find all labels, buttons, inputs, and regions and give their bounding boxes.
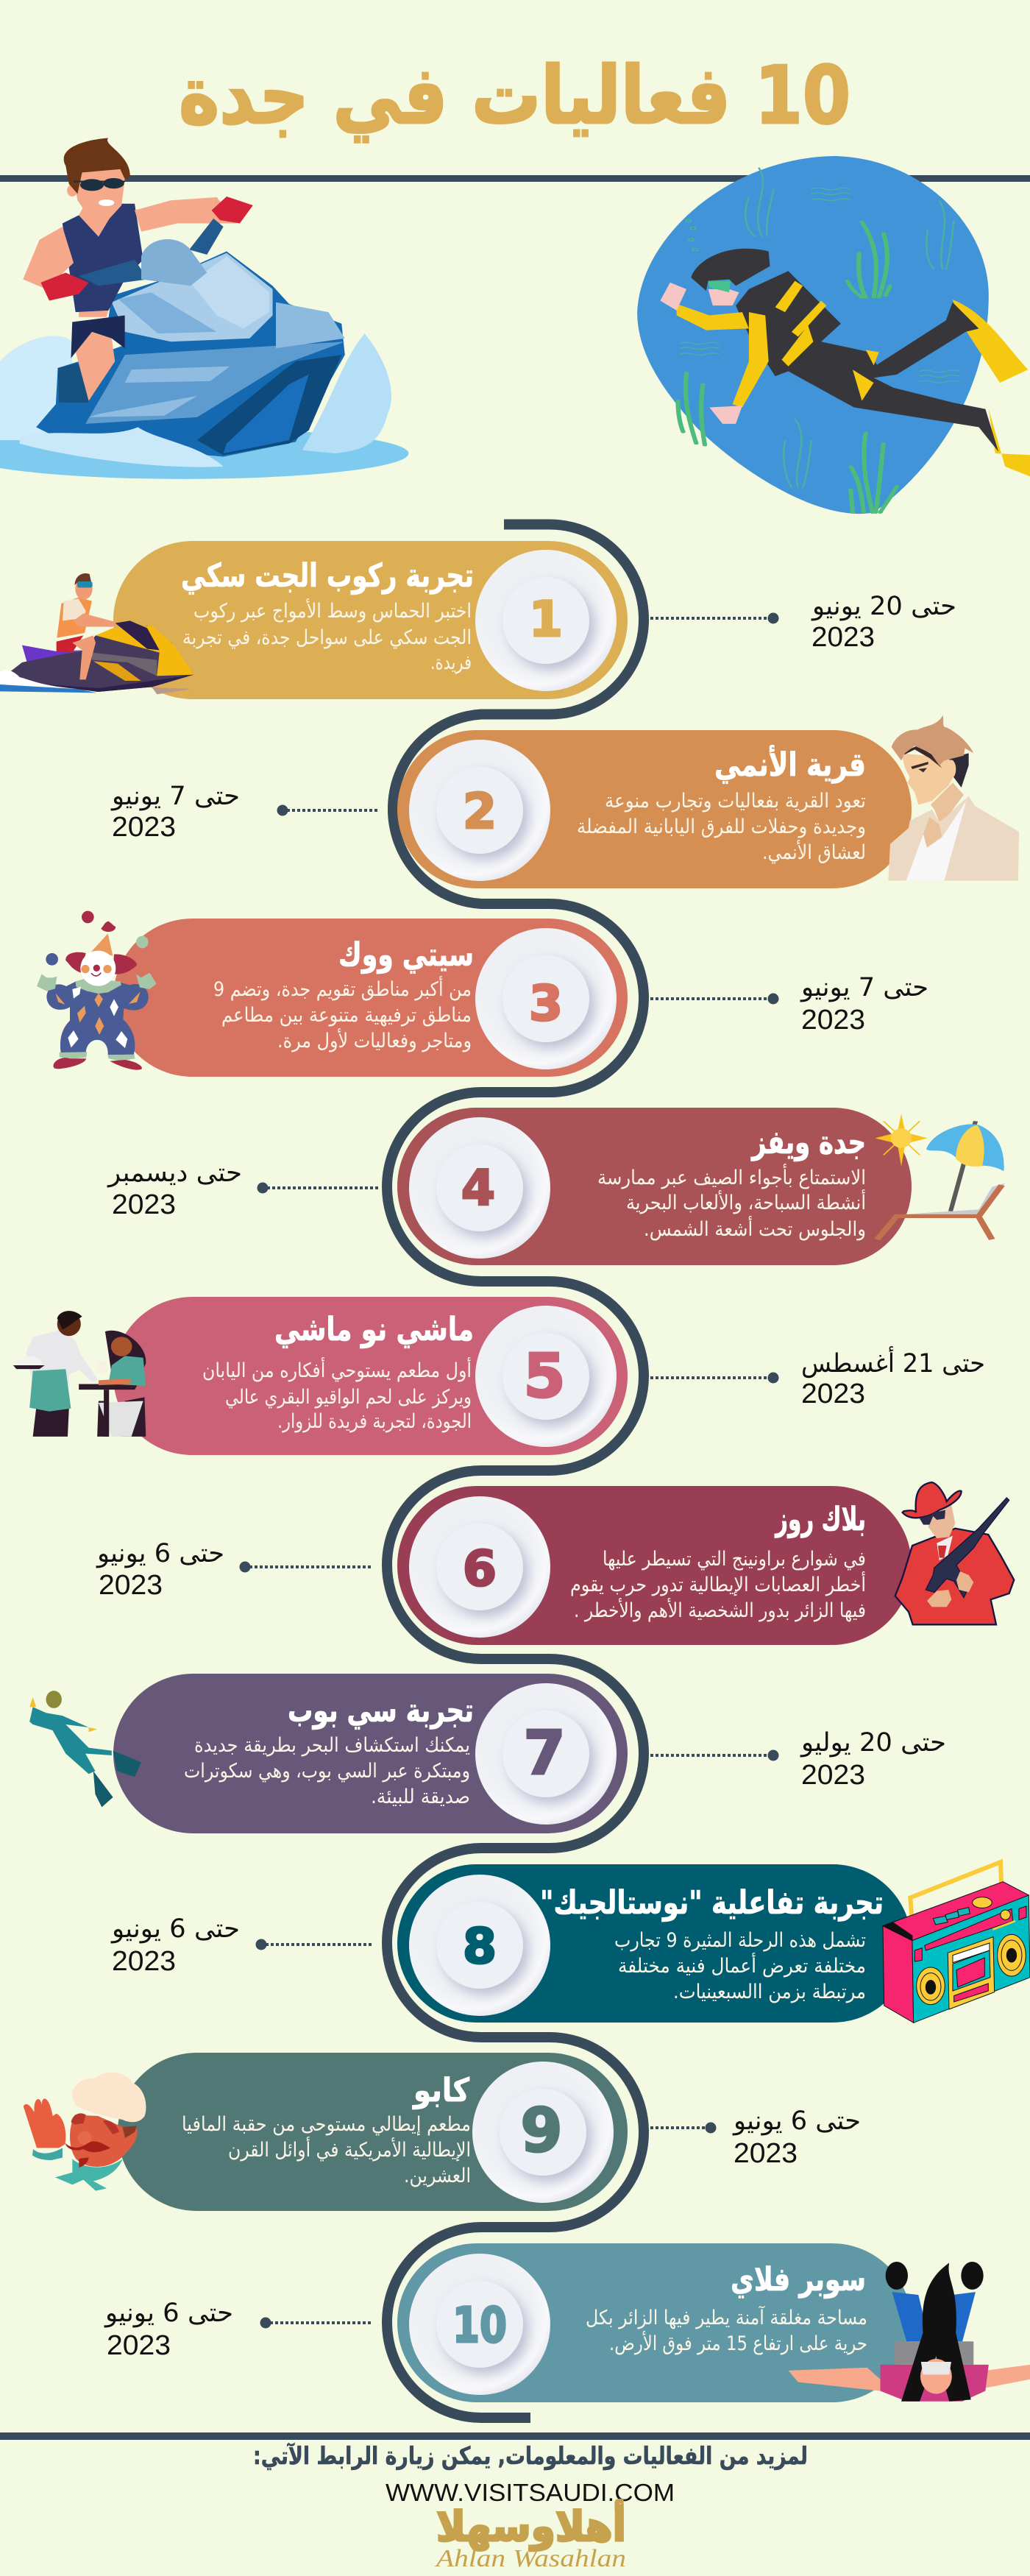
date 7 [800,1728,946,1791]
number plate 7: 7 [523,1719,566,1788]
number plate 4: 4 [461,1160,495,1217]
number plate 9: 9 [520,2096,563,2166]
body 2: تعود القرية بفعاليات وتجارب منوعة [605,790,866,813]
heading 7: تجربة سي بوب [288,1692,474,1730]
step 4: jeddah waves [107,1108,1005,1265]
date 7: 2023 [801,1760,865,1791]
pill 6 [397,1486,912,1645]
number plate 2: 2 [463,783,497,840]
number plate 6 [409,1496,550,1638]
date 8: 2023 [112,1946,176,1977]
icon: gangster with rifle [895,1482,1014,1624]
number plate 6: 6 [463,1540,497,1597]
body 9: الإيطالية الأمريكية في أوائل القرن [228,2136,471,2162]
date 2: حتى 7 يونيو [110,782,240,811]
date 4 [107,1158,242,1220]
body 6: أخطر العصابات الإيطالية تدور حرب يقوم [570,1571,866,1596]
serpentine timeline path [387,524,644,2418]
step 3: city walk [37,911,928,1077]
number plate 1: 1 [529,591,563,648]
number plate 8 [409,1875,550,2016]
date 1 [811,592,956,653]
icon: beach chair and umbrella [875,1114,1005,1239]
connector 6 [240,1562,373,1572]
date 1: 2023 [811,622,875,653]
date 9: حتى 6 يونيو [732,2106,861,2136]
body 4 [597,1163,866,1241]
connector 5 [650,1372,778,1384]
body 5 [202,1356,472,1433]
icon: skydiver [788,2262,1030,2402]
connector 1 [650,612,778,624]
heading 9: كابو [412,2072,469,2109]
step 1: jet ski [0,541,956,699]
heading 2: قرية الأنمي [714,745,866,784]
connector 2 [277,805,380,815]
pill 5 [113,1297,628,1455]
date 9 [732,2106,861,2169]
body 5: أول مطعم يستوحي أفكاره من اليابان [202,1356,472,1382]
body 8: تشمل هذه الرحلة المثيرة 9 تجارب [614,1929,866,1952]
body 9: العشرين. [404,2165,471,2187]
number plate 9 [472,2062,614,2203]
number plate 7 [475,1683,617,1825]
date 5 [801,1346,985,1409]
body 7: صديقة للبيئة. [371,1786,470,1808]
number plate 1 [475,550,617,691]
body 5: الجودة، لتجربة فريدة للزوار. [277,1410,472,1433]
body 10: مساحة مغلقة آمنة يطير فيها الزائر بكل [586,2306,867,2329]
date 9: 2023 [734,2138,798,2169]
body 7: يمكنك استكشاف البحر بطريقة جديدة [194,1734,470,1757]
pill 4 [397,1108,912,1265]
body 9 [182,2113,471,2187]
body 8 [614,1929,866,2003]
body 10: حرية على ارتفاع 15 متر فوق الأرض. [609,2330,867,2355]
body 1: فريدة. [430,651,472,674]
body 7 [184,1734,470,1808]
title: 10 فعاليات في جدة [179,50,850,142]
body 2 [577,790,866,864]
date 1: حتى 20 يونيو [811,592,956,621]
body 4: أنشطة السباحة، والألعاب البحرية [626,1189,866,1214]
date 6: 2023 [99,1570,163,1601]
number plate 10: 10 [452,2297,507,2354]
step 6: black rose [96,1482,1014,1645]
body 3 [213,975,472,1052]
connector 4 [258,1182,379,1194]
date 4: 2023 [112,1189,176,1220]
body 10 [586,2306,867,2355]
body 1: الجت سكي على سواحل جدة، في تجربة [182,626,472,649]
number plate 5 [475,1306,617,1447]
pill 8 [397,1864,912,2023]
date 4: حتى ديسمبر [107,1158,242,1188]
body 8: مختلفة تعرض أعمال فنية مختلفة [618,1952,866,1978]
body 7: ومبتكرة عبر السي بوب، وهي سكوترات [184,1760,470,1783]
heading 3: سيتي ووك [338,936,474,974]
number plate 4 [409,1117,550,1259]
heading 5: ماشي نو ماشي [274,1311,474,1348]
date 5: 2023 [801,1379,865,1409]
body 1: اختبر الحماس وسط الأمواج عبر ركوب [193,598,472,623]
body 2: لعشاق الأنمي. [762,839,866,864]
footer call to action: لمزيد من الفعاليات والمعلومات, يمكن زيارة الرابط الآتي: [253,2441,808,2471]
body 3: مناطق ترفيهية متنوعة بين مطاعم [221,1004,472,1027]
pill 1 [113,541,628,699]
heading 8: تجربة تفاعلية "نوستالجيك" [540,1884,884,1922]
number plate 3 [475,928,617,1069]
pill 7 [113,1674,628,1833]
body 9: مطعم إيطالي مستوحى من حقبة المافيا [182,2113,471,2136]
date 2: 2023 [112,812,176,843]
body 4: الاستمتاع بأجواء الصيف عبر ممارسة [597,1163,866,1189]
step 7: seabob [29,1674,946,1833]
icon: anime character [888,715,1019,881]
connector 3 [650,994,778,1004]
step 5: mashi no mashi [13,1297,985,1455]
number plate 3: 3 [529,975,563,1032]
date 10: حتى 6 يونيو [104,2299,233,2328]
date 10 [104,2299,233,2361]
date 8: حتى 6 يونيو [110,1914,240,1944]
logo [435,2499,626,2572]
icon: retro boombox [883,1862,1030,2023]
date 3: 2023 [801,1005,865,1036]
heading 10: سوبر فلاي [731,2261,866,2299]
connector 7 [650,1750,778,1761]
date 8 [110,1914,240,1977]
icon: small jet ski rider [0,573,193,694]
pill 9 [118,2053,628,2211]
body 5: ويركز على لحم الواقيو البقري عالي [225,1386,472,1409]
date 10: 2023 [107,2330,171,2361]
icon: small diver [29,1691,141,1807]
footer divider bar [0,2432,1030,2440]
body 2: وجديدة وحفلات للفرق اليابانية المفضلة [577,815,866,838]
illustration: man on blue jet ski [0,138,408,479]
footer url: WWW.VISITSAUDI.COM [386,2479,675,2506]
connector 9 [650,2123,717,2133]
date 3: حتى 7 يونيو [800,973,928,1002]
date 6: حتى 6 يونيو [96,1539,224,1568]
date 7: حتى 20 يوليو [800,1728,946,1758]
body 3: ومتاجر وفعاليات لأول مرة. [277,1027,472,1052]
icon: juggling clown [37,911,157,1070]
step 9: capo [24,2053,861,2211]
heading 6: بلاك روز [775,1501,866,1538]
body 6: في شوارع براونينج التي تسيطر عليها [603,1548,866,1571]
date 2 [110,782,240,843]
date 5: حتى 21 أغسطس [801,1346,985,1379]
body 6: فيها الزائر بدور الشخصية الأهم والأخطر . [574,1597,866,1622]
number plate 8: 8 [463,1918,497,1975]
pill 2 [397,730,912,888]
heading 4: جدة ويفز [750,1124,866,1161]
icon: chef [24,2073,146,2191]
pill 3 [113,919,628,1077]
step 10: super fly [104,2243,1030,2402]
logo: أهلاوسهلا [436,2499,626,2551]
heading 1: تجربة ركوب الجت سكي [181,557,474,595]
illustration: scuba diver on blue blob [637,156,1030,514]
body 8: مرتبطة بزمن االسبعينيات. [673,1981,866,2003]
number plate 10 [409,2254,550,2395]
connector 10 [260,2317,373,2329]
body 3: من أكبر مناطق تقويم جدة، وتضم 9 [213,975,472,1001]
step 2: anime village [110,715,1019,888]
number plate 5: 5 [523,1342,566,1412]
number plate 2 [409,740,550,881]
body 4: والجلوس تحت أشعة الشمس. [644,1215,866,1241]
header divider bar [0,175,1030,182]
body 1 [182,598,472,674]
date 3 [800,973,928,1036]
body 6 [570,1548,866,1622]
logo: Ahlan Wasahlan [435,2545,626,2572]
icon: waiter and diner [13,1311,146,1437]
pill 10 [397,2243,912,2402]
connector 8 [256,1939,373,1950]
step 8: nostalgic experience [110,1862,1030,2023]
date 6 [96,1539,224,1601]
